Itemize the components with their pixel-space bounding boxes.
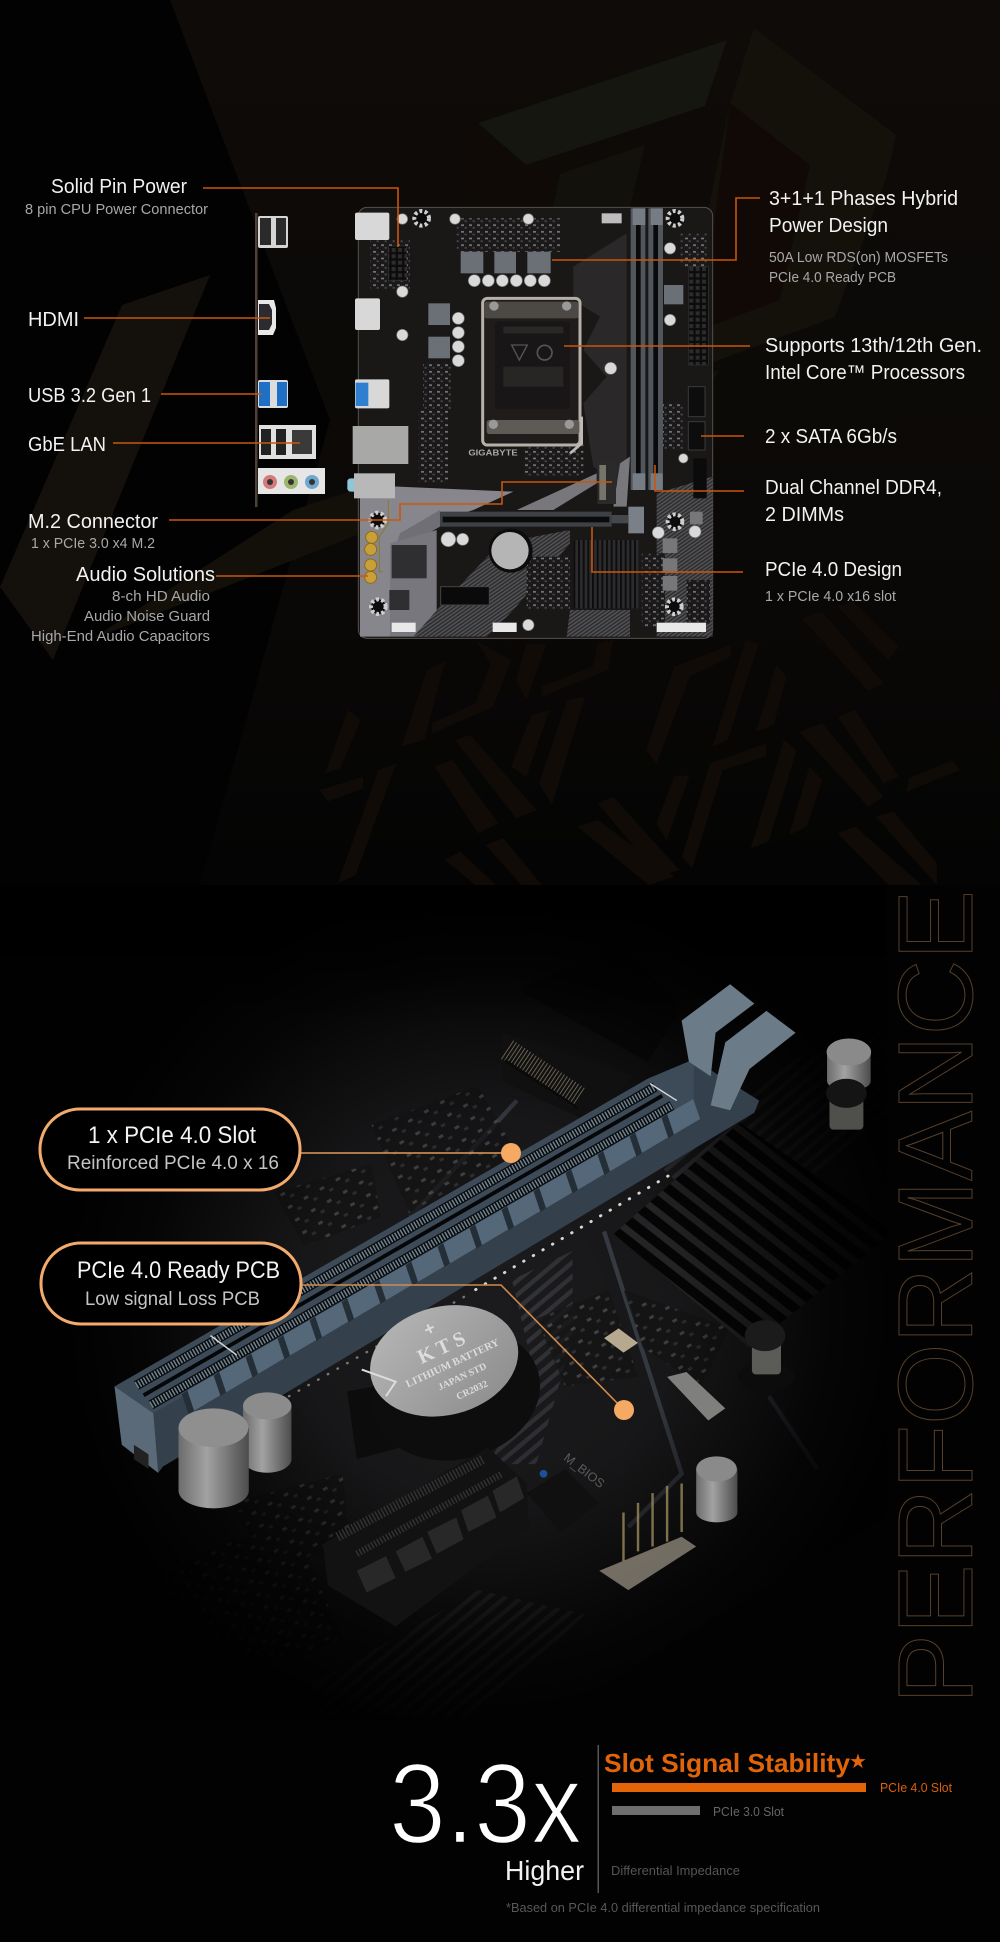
rear I/O panel — [255, 213, 325, 507]
BIOS chip: M_BIOS — [561, 1451, 607, 1491]
label: Solid Pin Power: Solid Pin Power — [51, 176, 187, 198]
bar: PCIe 4.0 Slot: PCIe 4.0 Slot — [880, 1780, 952, 1795]
PCIe x1 slot — [323, 1447, 529, 1626]
BIOS chip — [528, 1453, 604, 1500]
slot ribs — [182, 1099, 700, 1415]
label: DDR4: 2 DIMMs — [765, 504, 844, 526]
divider — [598, 1745, 599, 1893]
USB 3.2 connector — [355, 379, 389, 408]
bar: PCIe 4.0 Slot — [612, 1780, 952, 1795]
callout pill: PCIe 4.0 Ready PCB: Low signal Loss PCB — [85, 1289, 260, 1310]
mounting holes and ring chokes — [370, 211, 682, 614]
slot latches — [682, 984, 796, 1110]
PCIe x16 slot — [115, 1059, 759, 1473]
callout pill: 1 x PCIe 4.0 Slot: 1 x PCIe 4.0 Slot — [88, 1122, 256, 1149]
M.2 slot — [597, 461, 616, 504]
heatsink — [573, 540, 638, 608]
label: Audio Solutions: High-End Audio Capacitors — [31, 628, 210, 645]
label: M.2 Connector — [28, 511, 158, 552]
battery engraving — [405, 1324, 498, 1399]
icon: USB 2.0 stacked ports — [258, 216, 288, 248]
label: PCIe 4.0 Design — [765, 559, 902, 605]
LAN connector — [353, 426, 408, 464]
background: tech stripe pattern — [320, 602, 960, 885]
SMD component clusters — [229, 1092, 724, 1606]
bar chart: signal stability — [611, 1780, 952, 1878]
battery engraving: JAPAN STD — [436, 1361, 488, 1393]
callout: PCIe slot leader and dot — [300, 1143, 521, 1163]
USB header — [693, 458, 707, 498]
label: Audio Solutions — [31, 564, 215, 645]
bar: PCIe 3.0 Slot — [612, 1804, 784, 1819]
M.2 connector — [501, 1040, 585, 1109]
callout pill: PCIe 4.0 Ready PCB: PCIe 4.0 Ready PCB — [77, 1257, 280, 1284]
close-up photo scene: PCIe slot — [114, 984, 872, 1660]
audio capacitors — [365, 531, 378, 583]
background: angular logo shapes — [0, 0, 1000, 885]
audio chip — [389, 545, 427, 610]
label: processor support: Intel Core™ Processors — [765, 362, 965, 384]
stat caption: Higher: Higher — [505, 1855, 584, 1886]
label: power phases — [769, 188, 958, 286]
CPU socket — [483, 298, 582, 453]
crystal and fuse components — [604, 1328, 725, 1420]
footnote: *Based on PCIe 4.0 differential impedance specification — [506, 1900, 820, 1915]
icon: audio jacks — [258, 468, 325, 494]
motherboard — [347, 207, 713, 638]
leader lines: top motherboard callouts — [84, 188, 760, 576]
white headers — [392, 213, 706, 632]
battery engraving: K T S — [414, 1328, 469, 1369]
big stat: 3.3x: 3.3x — [389, 1741, 582, 1868]
label: power phases: 3+1+1 Phases Hybrid — [769, 188, 958, 210]
label: power phases: PCIe 4.0 Ready PCB — [769, 269, 896, 286]
label: Audio Solutions: Audio Solutions — [76, 564, 215, 586]
battery engraving: + — [420, 1317, 439, 1340]
callout pill: PCIe 4.0 Ready PCB — [41, 1243, 301, 1324]
label: PCIe 4.0 Design: 1 x PCIe 4.0 x16 slot — [765, 588, 897, 605]
vertical outlined title: PERFORMANCE: PERFORMANCE — [877, 890, 995, 1704]
SATA connectors — [688, 387, 705, 450]
board brand: GIGABYTE: GIGABYTE — [468, 448, 518, 458]
battery engraving: CR2032 — [455, 1378, 490, 1403]
board PCB — [358, 207, 713, 638]
axis label: Differential Impedance — [611, 1863, 740, 1878]
label: M.2 Connector: 1 x PCIe 3.0 x4 M.2 — [31, 535, 155, 552]
callout pill: 1 x PCIe 4.0 Slot: Reinforced PCIe 4.0 x 16 — [67, 1153, 279, 1174]
icon: HDMI port — [258, 300, 276, 335]
label: Solid Pin Power: 8 pin CPU Power Connector — [25, 201, 208, 218]
dim background sockets — [517, 945, 682, 1062]
USB 2.0 connector — [355, 213, 389, 240]
label: Solid Pin Power — [25, 176, 208, 218]
label: USB 3.2 Gen 1: USB 3.2 Gen 1 — [28, 385, 151, 407]
PCIe x1 slot — [441, 587, 489, 605]
icon: USB 3.2 ports — [258, 380, 288, 408]
bar: PCIe 3.0 Slot: PCIe 3.0 Slot — [713, 1804, 784, 1819]
8 pin CPU power connector — [388, 246, 407, 281]
label: SATA: 2 x SATA 6Gb/s — [765, 426, 897, 448]
heatsink standoffs — [738, 1079, 867, 1391]
icon: LAN and USB ports — [259, 425, 316, 459]
board light traces — [410, 1101, 817, 1527]
label: Audio Solutions: 8-ch HD Audio — [112, 588, 210, 605]
solder pins — [289, 1171, 677, 1396]
MOSFET chokes — [428, 252, 683, 358]
CMOS battery — [489, 529, 533, 573]
HDMI connector — [355, 298, 380, 330]
chart title: Slot Signal Stability: Slot Signal Stability — [604, 1748, 851, 1778]
battery engraving: LITHIUM BATTERY — [404, 1337, 501, 1390]
capacitors — [397, 214, 701, 631]
audio connector — [347, 473, 395, 498]
PCIe x16 slot — [440, 507, 644, 533]
24 pin ATX connector — [688, 267, 708, 365]
dim vignette — [0, 882, 890, 1726]
pin header — [599, 1483, 696, 1590]
heatsink fins — [614, 1122, 813, 1344]
callout pill: 1 x PCIe 4.0 Slot — [40, 1109, 300, 1190]
label: power phases: Power Design — [769, 215, 888, 237]
label: HDMI: HDMI — [28, 309, 79, 331]
label: M.2 Connector: M.2 Connector — [28, 511, 158, 533]
label: PCIe 4.0 Design: PCIe 4.0 Design — [765, 559, 902, 581]
label: processor support: Supports 13th/12th Gen. — [765, 335, 982, 357]
label: DDR4: Dual Channel DDR4, — [765, 477, 942, 499]
inductors — [663, 512, 703, 591]
CMOS battery holder — [348, 1305, 540, 1460]
chart title: Slot Signal Stability: ★ — [849, 1749, 867, 1773]
board hatched traces — [488, 1251, 573, 1464]
label: GbE LAN: GbE LAN — [28, 434, 106, 456]
label: power phases: 50A Low RDS(on) MOSFETs — [769, 249, 948, 266]
label: processor support — [765, 335, 982, 384]
callout: PCB leader and dot — [300, 1285, 634, 1420]
audio noise guard line — [379, 500, 388, 572]
DIMM slots — [631, 208, 663, 490]
label: Audio Solutions: Audio Noise Guard — [84, 608, 210, 625]
capacitors — [179, 1039, 871, 1522]
label: DDR4 — [765, 477, 942, 526]
